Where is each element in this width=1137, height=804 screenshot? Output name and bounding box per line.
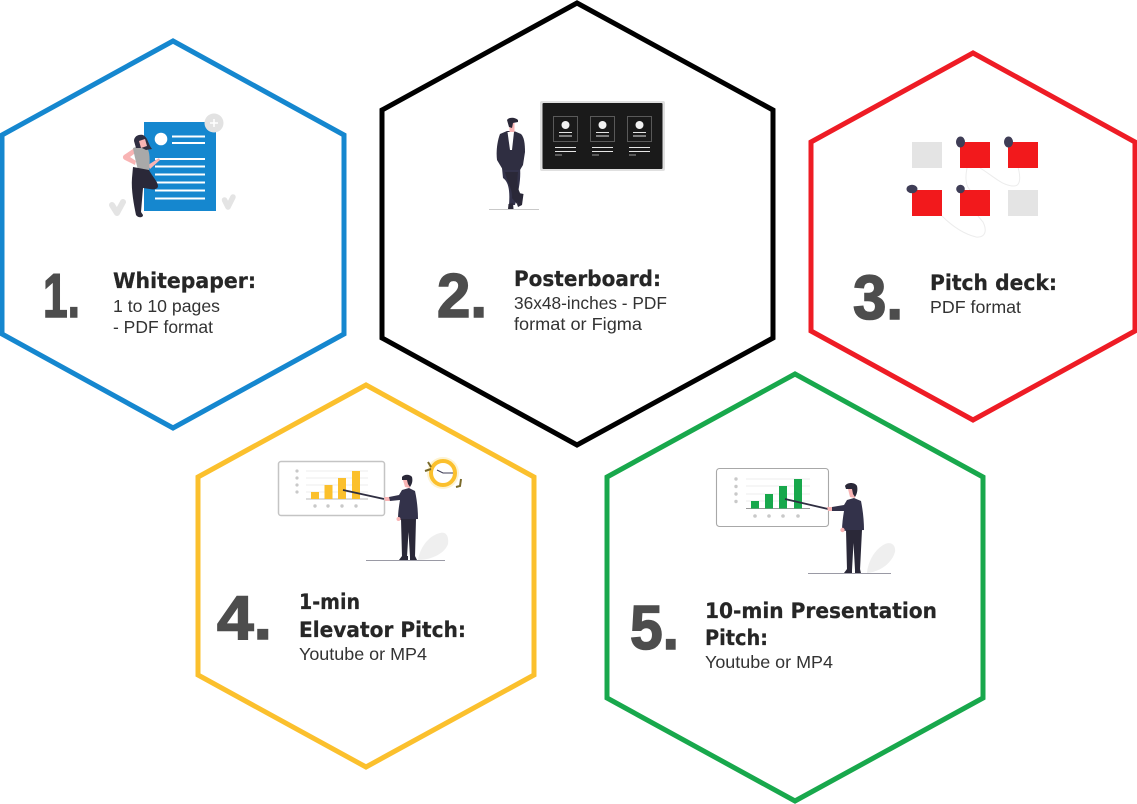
panel: posterboard	[382, 3, 773, 445]
number 2: 2.	[437, 262, 487, 331]
icon: slide grid	[906, 136, 1038, 237]
heading: Posterboard:	[514, 267, 661, 291]
heading: Whitepaper:	[113, 269, 256, 293]
hexagon: green	[607, 374, 983, 801]
heading: 1-min	[299, 590, 360, 614]
panel: whitepaper	[2, 41, 344, 428]
description	[113, 296, 220, 337]
panel: pitch deck	[811, 53, 1135, 420]
number 4: 4.	[217, 584, 272, 653]
description	[514, 293, 667, 334]
panel: elevator pitch	[198, 385, 534, 767]
hexagon: yellow	[198, 385, 534, 767]
description: format or Figma	[514, 314, 642, 334]
heading: Pitch deck:	[930, 271, 1057, 295]
hexagon: black	[382, 3, 773, 445]
number 5: 5.	[630, 594, 679, 663]
description: PDF format	[930, 297, 1021, 317]
number 3: 3.	[853, 264, 903, 333]
hexagon: red	[811, 53, 1135, 420]
heading: Elevator Pitch:	[299, 618, 466, 642]
description: 1 to 10 pages	[113, 296, 220, 316]
heading	[299, 590, 466, 642]
heading: 10-min Presentation	[705, 599, 937, 623]
icon: presenter with chart	[716, 468, 895, 574]
heading: Pitch:	[705, 626, 768, 650]
number 1: 1.	[43, 262, 80, 331]
description: - PDF format	[113, 317, 213, 337]
description: 36x48-inches - PDF	[514, 293, 667, 313]
heading	[705, 599, 937, 650]
panel: presentation pitch	[607, 374, 983, 801]
icon: woman with document	[112, 114, 233, 217]
hexagon: blue	[2, 41, 344, 428]
icon: man with poster board	[489, 101, 665, 210]
description: Youtube or MP4	[299, 644, 427, 664]
icon: presenter with chart and clock	[278, 457, 461, 560]
description: Youtube or MP4	[705, 652, 833, 672]
